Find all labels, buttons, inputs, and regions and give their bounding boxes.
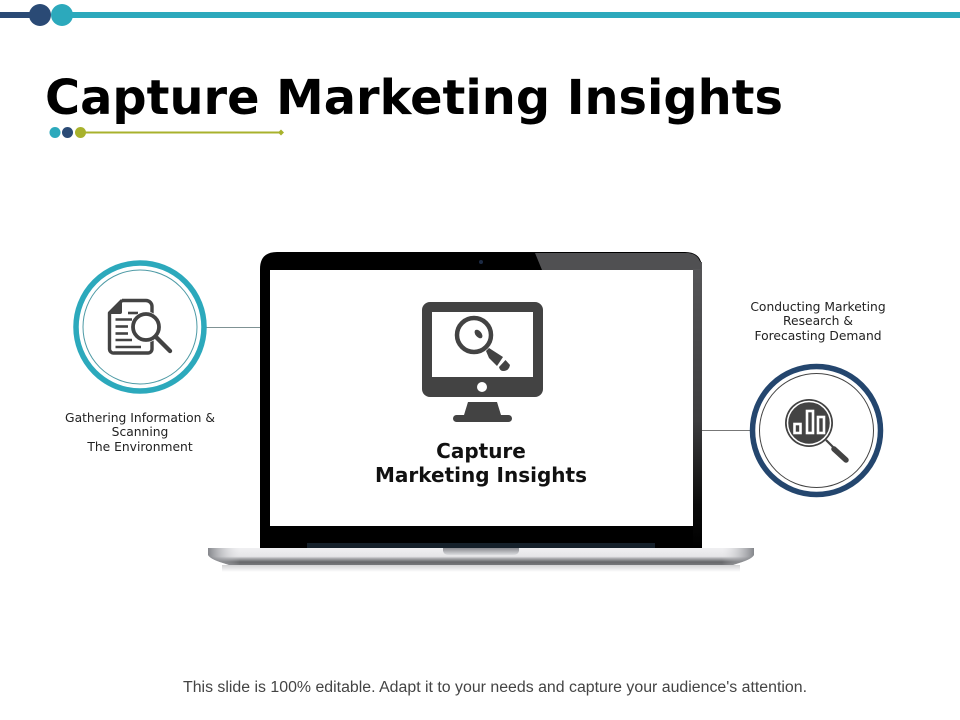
title underline with dots [50,127,284,138]
footer note: This slide is 100% editable. Adapt it to your needs and capture your audience's attention. [183,679,807,696]
laptop [208,252,754,572]
icon: monitor with magnifier [422,302,543,422]
laptop camera [479,260,483,264]
laptop base [208,548,754,565]
connector: laptop to right circle [702,430,751,432]
title: Capture Marketing Insights [45,70,783,126]
icon: magnifier with bar chart [785,399,846,460]
left caption: The Environment [86,440,193,454]
top decorative header bar [0,4,960,26]
connector: left circle to laptop [206,326,260,328]
laptop screen [270,270,693,526]
laptop lid [260,252,702,548]
left caption: Scanning [112,425,168,439]
left circle: gathering information [76,263,204,391]
right caption: Forecasting Demand [754,329,882,343]
center label: Capture [436,439,526,463]
icon: document with magnifier [108,299,170,353]
left caption: Gathering Information & [65,411,215,425]
right caption: Research & [783,314,853,328]
laptop shadow [222,565,740,572]
right caption: Conducting Marketing [750,300,886,314]
center label: Marketing Insights [375,463,587,487]
right circle: conducting research [752,366,880,494]
